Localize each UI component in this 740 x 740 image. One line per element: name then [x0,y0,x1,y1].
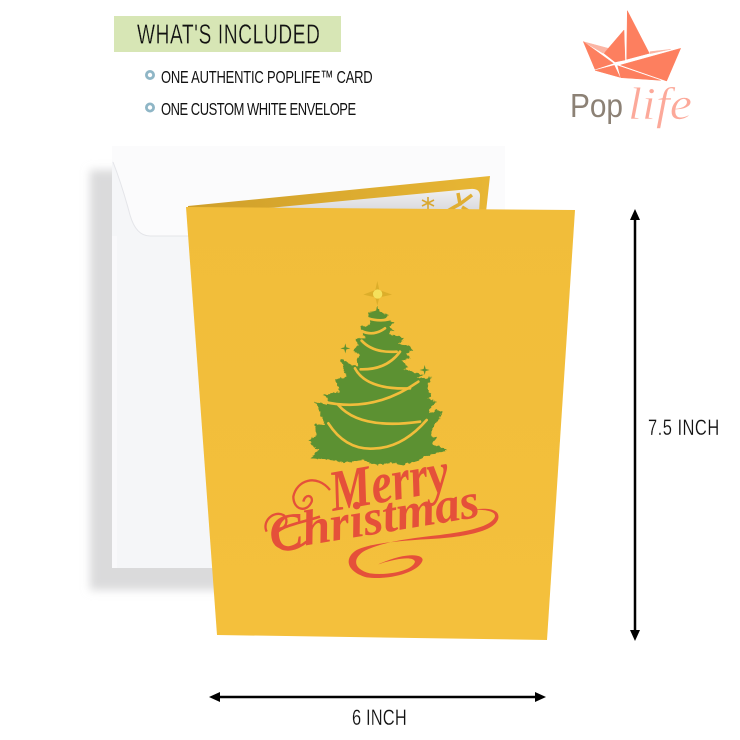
width label: 6 INCH [352,706,407,731]
logo: poplife boat [570,11,692,129]
greeting: merry christmas: Merry [323,439,454,524]
christmas tree [308,306,447,465]
logo: poplife boat: Pop [570,87,623,124]
tree star [363,281,392,306]
height label: 7.5 INCH [648,416,719,441]
list: included items: ONE AUTHENTIC POPLIFE™ CARD [161,68,373,88]
heading: what's included: WHAT'S INCLUDED [137,19,320,51]
card front [186,207,575,640]
height arrow [630,209,640,641]
list: included items [146,68,373,120]
list: included items: ONE CUSTOM WHITE ENVELOPE [161,100,356,120]
envelope shadow [90,170,290,590]
greeting: merry christmas [265,439,498,578]
width arrow [209,692,546,702]
logo: poplife boat: life [628,78,692,129]
greeting: merry christmas: Christmas [265,472,483,562]
envelope [112,146,505,568]
card back panel [188,176,490,212]
